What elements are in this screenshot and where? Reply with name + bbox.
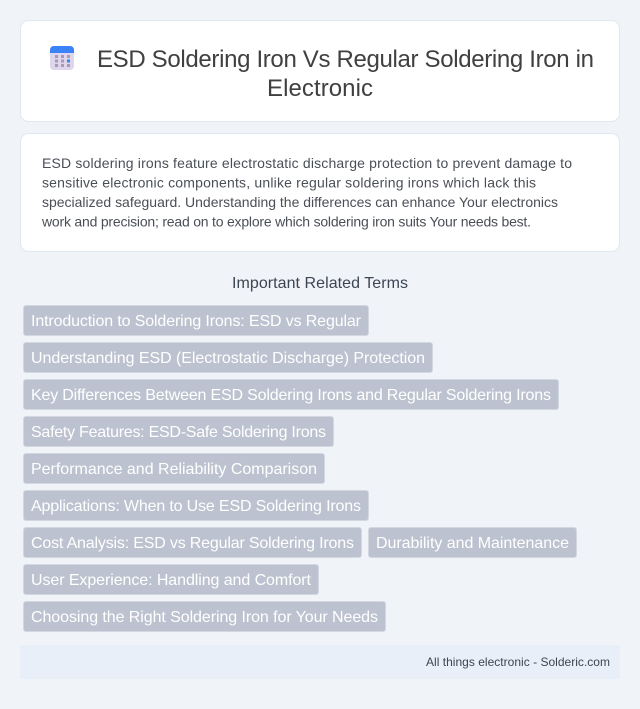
term 6 bbox=[24, 490, 368, 520]
title: ESD Soldering Iron Vs Regular Soldering Iron in bbox=[97, 46, 594, 73]
term 1 bbox=[24, 306, 368, 336]
term tags bbox=[24, 306, 576, 632]
term 8: Durability and Maintenance bbox=[376, 535, 569, 552]
term 2: Understanding ESD (Electrostatic Discharge) Protection bbox=[31, 350, 425, 367]
footer bbox=[20, 645, 620, 679]
term 7: Cost Analysis: ESD vs Regular Soldering Irons bbox=[31, 535, 354, 552]
term 6: Applications: When to Use ESD Soldering Irons bbox=[31, 498, 361, 515]
term 3: Key Differences Between ESD Soldering Irons and Regular Soldering Irons bbox=[31, 387, 551, 404]
panel: intro text: specialized safeguard. Understanding the differences can enhance Your electronics bbox=[42, 194, 558, 210]
term 9 bbox=[24, 564, 318, 594]
icon: calendar bbox=[50, 46, 74, 70]
term 8 bbox=[368, 528, 576, 558]
term 10: Choosing the Right Soldering Iron for Your Needs bbox=[31, 609, 378, 626]
term 5 bbox=[24, 454, 324, 484]
heading: important related terms: Important Related Terms bbox=[232, 275, 408, 292]
term 2 bbox=[24, 342, 432, 372]
panel: intro text: work and precision; read on to explore which soldering iron suits Your needs best. bbox=[41, 214, 531, 230]
term 9: User Experience: Handling and Comfort bbox=[31, 572, 312, 589]
term 4: Safety Features: ESD-Safe Soldering Irons bbox=[31, 424, 326, 441]
term 5: Performance and Reliability Comparison bbox=[31, 461, 317, 478]
term 7 bbox=[24, 528, 362, 558]
title bbox=[97, 46, 594, 102]
term 10 bbox=[24, 602, 386, 632]
term 3 bbox=[24, 380, 558, 410]
title: Electronic bbox=[267, 75, 373, 102]
term 1: Introduction to Soldering Irons: ESD vs Regular bbox=[31, 313, 362, 330]
term 4 bbox=[24, 416, 334, 446]
footer: All things electronic - Solderic.com bbox=[426, 655, 610, 669]
panel: intro text bbox=[20, 134, 620, 252]
panel: header bbox=[20, 20, 620, 122]
panel: intro text: ESD soldering irons feature electrostatic discharge protection to prevent damage to bbox=[42, 155, 572, 171]
panel: intro text: sensitive electronic components, unlike regular soldering irons which lack this bbox=[42, 174, 536, 190]
